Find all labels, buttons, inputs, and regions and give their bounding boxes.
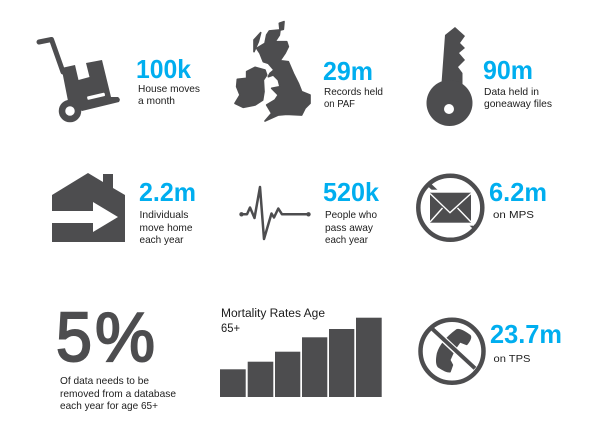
label: people who pass away each year: People who [325, 209, 377, 221]
value: 23.7m: 23.7m [490, 319, 562, 349]
icon: no phone [420, 320, 484, 383]
stat: PAF records [235, 22, 383, 121]
label: records held on PAF: on PAF [324, 98, 355, 110]
label: house moves a month: a month [138, 95, 175, 107]
label: data to be removed: each year for age 65+ [60, 400, 158, 412]
value: 520k: 520k [323, 177, 380, 207]
label: people who pass away each year: each year [325, 234, 368, 246]
label: data held in goneaway files: Data held in [484, 86, 539, 98]
value: 6.2m: 6.2m [489, 177, 547, 207]
label: on MPS: on MPS [493, 209, 534, 221]
chart title: Mortality Rates Age [221, 308, 325, 320]
bars [220, 318, 382, 397]
stat: deaths per year [239, 177, 380, 246]
label: individuals move home each year: Individuals [140, 209, 188, 221]
label: data to be removed: removed from a database [60, 388, 176, 400]
icon: no mail [418, 176, 482, 240]
value: 90m: 90m [483, 55, 533, 85]
value: 100k: 100k [136, 54, 192, 84]
stat: goneaway files [426, 27, 552, 126]
stat: house moves [39, 40, 200, 119]
value: 5%: % [95, 298, 155, 376]
value: 5%: 5 [56, 298, 92, 376]
chart title: 65+ [221, 323, 240, 335]
icon: hand truck with box [39, 40, 120, 119]
label: house moves a month: House moves [138, 83, 200, 95]
icon: UK and Ireland map [235, 22, 310, 121]
icon: house with arrow [52, 173, 125, 242]
value: 2.2m: 2.2m [139, 177, 196, 207]
label: records held on PAF: Records held [324, 86, 383, 98]
icon: key [426, 27, 472, 126]
stat: individuals moving [52, 173, 196, 246]
stat: MPS [418, 176, 547, 240]
stat: 5 percent [56, 298, 176, 412]
label: individuals move home each year: move home [140, 222, 193, 234]
stat: TPS [420, 319, 562, 383]
label: data held in goneaway files: goneaway files [484, 98, 552, 110]
label: on TPS: on TPS [494, 353, 530, 365]
icon: heartbeat line [239, 187, 311, 239]
bar chart: mortality rates age 65+ [220, 308, 382, 397]
value: 29m: 29m [323, 56, 373, 86]
label: individuals move home each year: each year [140, 234, 184, 246]
label: data to be removed: Of data needs to be [60, 375, 149, 387]
label: people who pass away each year: pass away [325, 222, 374, 234]
